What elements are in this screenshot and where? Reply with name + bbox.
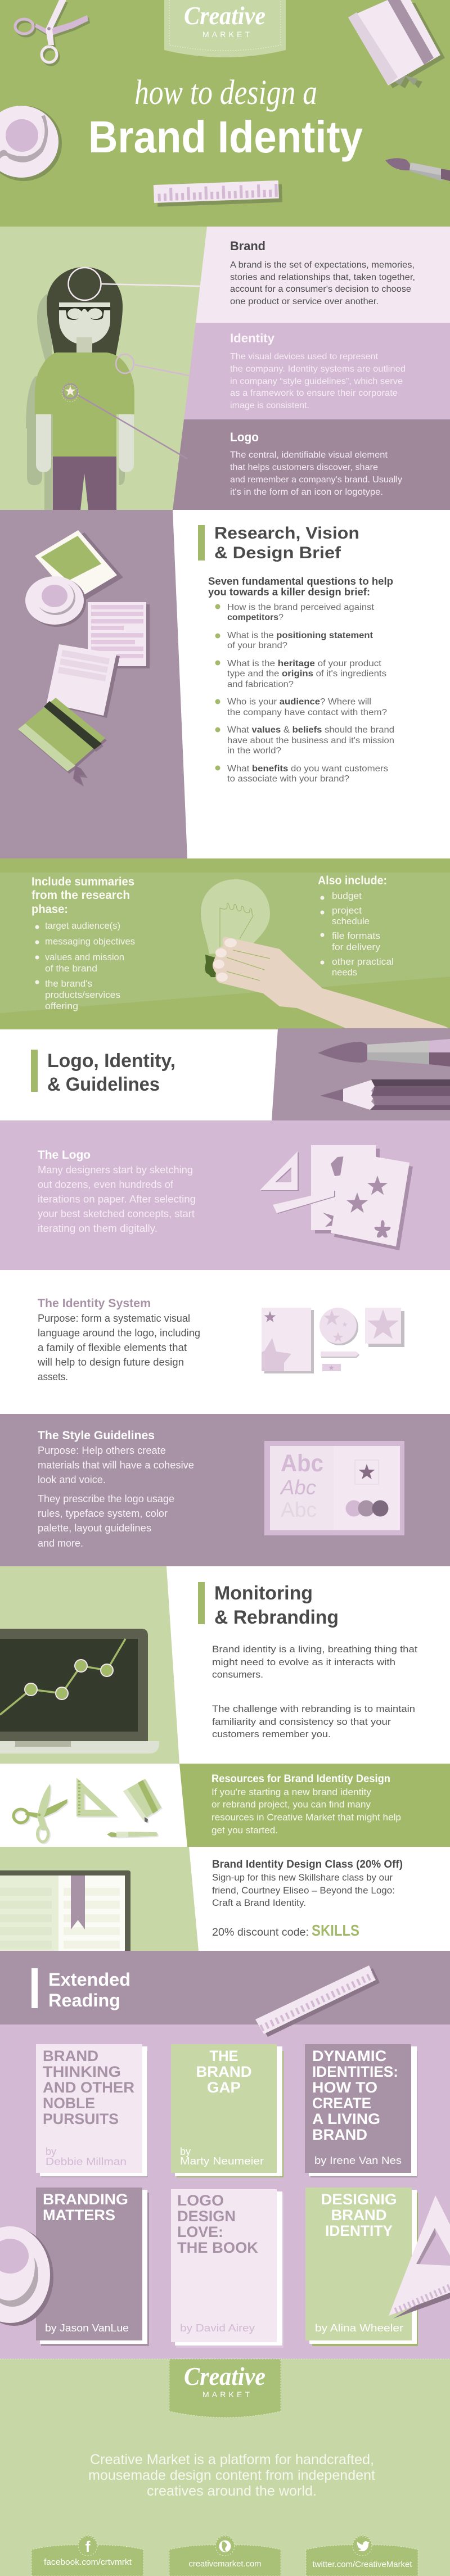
list: seven questions: What is the heritage of your product — [227, 659, 382, 668]
book: Logo Design Love: THE BOOK — [177, 2239, 258, 2256]
text: intro: Seven fundamental questions to help — [208, 576, 393, 587]
book: Dynamic Identities: IDENTITIES: — [312, 2063, 398, 2080]
illustration: coffee cup — [0, 2226, 53, 2326]
logo badge: MARKET — [202, 30, 250, 39]
book: Logo Design Love: by David Airey — [180, 2322, 255, 2334]
book: Dynamic Identities: A LIVING — [312, 2110, 380, 2127]
illustration: stationery — [262, 1308, 401, 1371]
tab: website: creativemarket.com — [189, 2559, 261, 2569]
text: include summaries: phase: — [32, 903, 68, 916]
illustration: brush and pencil — [272, 1028, 450, 1120]
text: include summaries: products/services — [45, 990, 120, 1000]
text: style guidelines: The Style Guidelines — [38, 1429, 155, 1442]
heading: logo, identity, guidelines: & Guidelines — [47, 1074, 160, 1095]
book: Logo Design Love: LOVE: — [177, 2224, 223, 2240]
text: resources — [212, 1773, 401, 1836]
text: the logo: your best sketched concepts, start — [38, 1208, 195, 1219]
text: style guidelines: materials that will have a cohesive — [38, 1459, 194, 1471]
panel: Identity: image is consistent. — [230, 401, 309, 410]
book: The Brand Gap: THE — [209, 2048, 238, 2064]
logo badge — [164, 0, 286, 57]
logo badge: Creative — [184, 1, 266, 30]
panel: Logo: and remember a company's brand. Usually — [230, 475, 402, 485]
tab: facebook: facebook.com/crtvmrkt — [44, 2557, 132, 2567]
text: the logo: out dozens, even hundreds of — [38, 1179, 174, 1190]
text: class: Brand Identity Design Class (20% Off) — [212, 1859, 403, 1870]
text: include summaries: the brand's — [45, 979, 92, 989]
text: class: 20% discount code: — [212, 1927, 309, 1938]
text: the logo: iterations on paper. After selecting — [38, 1194, 196, 1205]
text: about Creative Market — [88, 2452, 375, 2499]
text: resources: or rebrand project, you can find many — [212, 1800, 371, 1810]
icon: ruler — [154, 180, 280, 203]
tab: twitter: twitter.com/CreativeMarket — [313, 2560, 412, 2569]
text: include summaries — [32, 875, 135, 1011]
title: Brand Identity: Brand Identity — [88, 112, 363, 162]
callout: brand circle and line — [69, 268, 200, 300]
icon: notebook — [348, 0, 440, 85]
book: The Brand Gap: Marty Neumeier — [180, 2155, 264, 2167]
text: include summaries: from the research — [32, 889, 130, 902]
text: about Creative Market: mousemade design content from independent — [88, 2467, 375, 2483]
list: seven questions: have about the business and it's mission — [227, 736, 394, 745]
list: seven questions: of your brand? — [227, 641, 287, 650]
illustration: laptop with chart — [0, 1629, 159, 1754]
text: class — [212, 1859, 403, 1939]
text: identity system — [37, 1297, 200, 1382]
text: about Creative Market: Creative Market is a platform for handcrafted, — [90, 2452, 374, 2467]
section: research, vision and design brief — [0, 510, 450, 858]
list: seven questions: the company have contact with them? — [227, 708, 387, 717]
text: monitoring body: consumers. — [212, 1669, 263, 1680]
text: monitoring body — [212, 1644, 417, 1739]
text: class: Sign-up for this new Skillshare class by our — [212, 1873, 393, 1883]
text: class: Craft a Brand Identity. — [212, 1898, 306, 1908]
book: Designing Brand Identity: by Alina Wheeler — [315, 2322, 403, 2334]
text: also include: budget — [332, 891, 362, 901]
logo badge — [169, 2359, 281, 2417]
section: footer — [0, 2359, 450, 2576]
text: the logo — [38, 1149, 196, 1234]
text: also include: for delivery — [332, 942, 381, 952]
text: identity system: will help to design future design — [37, 1357, 184, 1368]
text: the logo: iterating on them digitally. — [38, 1223, 158, 1234]
text: style guidelines: look and voice. — [38, 1474, 106, 1485]
text: style guidelines: They prescribe the logo usage — [38, 1493, 174, 1504]
list: seven questions: How is the brand perceived against — [227, 603, 375, 612]
list: seven questions: What benefits do you want customers — [227, 764, 388, 774]
book: Dynamic Identities: BRAND — [312, 2126, 367, 2143]
illustration: style guide: Abc — [281, 1450, 323, 1477]
book: Designing Brand Identity: BRAND — [331, 2207, 387, 2224]
illustration: hand — [213, 937, 450, 1029]
illustration: style guide — [264, 1441, 404, 1535]
book: Dynamic Identities: by Irene Van Nes — [314, 2155, 402, 2166]
tab: website — [169, 2536, 281, 2576]
list: seven questions: to associate with your brand? — [227, 774, 349, 784]
section: logo, identity and guidelines header — [0, 1028, 450, 1120]
text: style guidelines: palette, layout guidelines — [38, 1522, 151, 1534]
list: seven questions: What values & beliefs should the brand — [227, 725, 394, 735]
text: include summaries: target audience(s) — [45, 921, 120, 931]
list: seven questions: What is the positioning statement — [227, 631, 373, 640]
book: Designing Brand Identity: DESIGNIG — [321, 2191, 397, 2208]
text: intro — [208, 576, 393, 598]
illustration: paper with lines — [88, 602, 146, 666]
text: also include: Also include: — [318, 874, 387, 887]
heading: research, vision and design brief — [198, 524, 359, 562]
list: seven questions: and fabrication? — [227, 680, 294, 689]
text: class: SKILLS — [312, 1922, 359, 1939]
book: Branding Matters — [36, 2188, 149, 2346]
callout: identity circle and line — [116, 354, 189, 376]
book: Designing Brand Identity — [305, 2188, 418, 2346]
text: the logo: The Logo — [38, 1149, 91, 1162]
heading: monitoring and rebranding: Monitoring — [214, 1583, 313, 1604]
text: monitoring body: Brand identity is a living, breathing thing that — [212, 1644, 417, 1655]
text: monitoring body: The challenge with rebranding is to maintain — [212, 1703, 415, 1714]
book: Dynamic Identities: DYNAMIC — [312, 2048, 386, 2064]
book: Brand Thinking — [36, 2044, 148, 2177]
panel: Brand: A brand is the set of expectations, memories, — [230, 260, 415, 270]
section: extended reading header — [0, 1951, 450, 2024]
text: also include: other practical — [332, 957, 394, 967]
illustration: green notebook — [18, 698, 105, 784]
section: book grid — [0, 1965, 450, 2359]
text: also include: file formats — [332, 931, 380, 941]
panel: the style guidelines — [0, 1415, 450, 1566]
panel: the identity system — [0, 1270, 450, 1415]
text: include summaries: offering — [45, 1001, 78, 1011]
panel: Identity: in company “style guidelines”, which serve — [230, 377, 403, 386]
book: Brand Thinking: PURSUITS — [43, 2110, 119, 2127]
illustration: green tools — [14, 1778, 161, 1842]
text: resources: Resources for Brand Identity Design — [212, 1773, 390, 1785]
panel: Brand — [196, 227, 450, 323]
callout: logo star and line — [62, 384, 187, 459]
book: Branding Matters: MATTERS — [43, 2207, 115, 2224]
logo badge: MARKET — [202, 2390, 250, 2399]
panel: Brand: one product or service over another. — [230, 297, 379, 306]
illustration: sketches — [260, 1145, 410, 1246]
text: include summaries: messaging objectives — [45, 937, 135, 947]
panel: Brand: account for a consumer's decision to choose — [230, 284, 411, 294]
book: Brand Thinking: by — [46, 2146, 56, 2157]
book: Brand Thinking: Debbie Millman — [46, 2156, 127, 2167]
book: Dynamic Identities — [305, 2044, 417, 2177]
tab: facebook: f — [86, 2538, 91, 2555]
title: how to design a: how to design a — [134, 74, 317, 112]
panel: Identity: the company. Identity systems are outlined — [230, 364, 406, 374]
panel: Logo: Logo — [230, 430, 259, 444]
panel: Identity: The visual devices used to represent — [230, 352, 379, 361]
book: The Brand Gap — [171, 2044, 284, 2177]
panel: Logo — [173, 419, 450, 510]
list: seven questions: Who is your audience ? Where will — [227, 697, 371, 707]
panel: Brand: stories and relationships that, taken together, — [230, 273, 415, 282]
section: monitoring and rebranding — [0, 1566, 450, 1764]
heading: research, vision and design brief: & Design Brief — [214, 544, 341, 562]
tab: facebook — [32, 2536, 143, 2576]
text: identity system: The Identity System — [38, 1297, 151, 1310]
panel: Logo: The central, identifiable visual element — [230, 450, 388, 460]
icon: coffee cup and saucer — [0, 106, 62, 181]
text: style guidelines: Purpose: Help others create — [38, 1445, 166, 1456]
panel: the logo — [0, 1120, 450, 1270]
text: intro: you towards a killer design brief: — [208, 586, 370, 598]
text: also include: project — [332, 906, 362, 916]
list: seven questions: in the world? — [227, 746, 281, 756]
book: Designing Brand Identity: IDENTITY — [325, 2222, 393, 2239]
book: Logo Design Love: DESIGN — [177, 2208, 236, 2225]
text: resources: If you're starting a new brand identity — [212, 1787, 372, 1797]
illustration: style guide: Abc — [280, 1476, 316, 1499]
text: identity system: a family of flexible elements that — [38, 1342, 187, 1353]
text: also include: needs — [332, 968, 357, 978]
panel: Brand: Brand — [230, 239, 266, 253]
book: Brand Thinking: BRAND — [43, 2048, 98, 2064]
text: include summaries: Include summaries — [32, 875, 134, 888]
panel: Identity: Identity — [230, 331, 275, 345]
text: resources: resources in Creative Market that might help — [212, 1813, 401, 1823]
list: seven questions — [215, 603, 394, 784]
list: seven questions: competitors? — [227, 613, 284, 622]
heading: extended reading — [32, 1968, 130, 2010]
text: also include — [318, 874, 394, 978]
book: The Brand Gap: by — [180, 2146, 191, 2157]
panel: Logo: that helps customers discover, share — [230, 463, 378, 472]
text: include summaries: values and mission — [45, 952, 124, 962]
text: class: friend, Courtney Eliseo – Beyond the Logo: — [212, 1886, 395, 1896]
icon: scissors — [15, 0, 88, 62]
book: Brand Thinking: NOBLE — [43, 2095, 95, 2112]
section: brand identity design class — [0, 1847, 450, 1951]
book: Logo Design Love — [171, 2189, 284, 2348]
heading: extended reading: Extended — [48, 1969, 130, 1990]
text: also include: schedule — [332, 916, 370, 927]
heading: monitoring and rebranding — [198, 1582, 339, 1628]
hero section — [0, 0, 450, 227]
logo badge: Creative — [184, 2362, 266, 2390]
text: include summaries: of the brand — [45, 964, 97, 974]
heading: logo, identity, guidelines: Logo, Identity, — [47, 1050, 176, 1072]
list: seven questions: type and the origins of it's ingredients — [227, 669, 386, 679]
book: Dynamic Identities: CREATE — [312, 2095, 371, 2112]
book: Brand Thinking: AND OTHER — [43, 2079, 134, 2096]
figure: person with glasses — [26, 267, 134, 510]
text: style guidelines — [38, 1429, 194, 1549]
illustration: blank paper — [47, 644, 116, 716]
heading: extended reading: Reading — [48, 1990, 120, 2010]
illustration: tablet with book — [0, 1870, 130, 1951]
text: resources: get you started. — [212, 1825, 278, 1836]
text: style guidelines: rules, typeface system, color — [38, 1508, 168, 1519]
tab: twitter — [306, 2536, 418, 2576]
text: monitoring body: customers remember you. — [212, 1729, 331, 1739]
section: resources — [0, 1764, 450, 1847]
book: Branding Matters: by Jason VanLue — [45, 2322, 129, 2334]
panel: Identity: as a framework to ensure their corporate — [230, 388, 398, 398]
panel: Logo: it's in the form of an icon or logotype. — [230, 487, 383, 497]
book: Branding Matters: BRANDING — [43, 2191, 128, 2208]
book: Logo Design Love: LOGO — [177, 2192, 224, 2209]
illustration: tilted ruler — [255, 1965, 376, 2034]
text: about Creative Market: creatives around the world. — [147, 2483, 317, 2499]
text: monitoring body: familiarity and consistency so that your — [212, 1716, 391, 1727]
book: The Brand Gap: BRAND — [196, 2063, 252, 2080]
book: Brand Thinking: THINKING — [43, 2063, 121, 2080]
icon: paintbrush — [385, 158, 450, 181]
illustration: light bulb — [201, 879, 270, 977]
book: Dynamic Identities: HOW TO — [312, 2079, 377, 2096]
text: identity system: language around the logo, including — [38, 1327, 200, 1339]
text: identity system: assets. — [38, 1371, 68, 1382]
book: The Brand Gap: GAP — [207, 2079, 241, 2096]
heading: logo, identity, guidelines — [31, 1050, 176, 1095]
heading: research, vision and design brief: Research, Vision — [214, 524, 359, 543]
text: style guidelines: and more. — [38, 1538, 83, 1549]
section: definitions — [0, 227, 450, 510]
heading: monitoring and rebranding: & Rebranding — [214, 1607, 339, 1628]
illustration: coffee cup — [25, 576, 86, 627]
text: the logo: Many designers start by sketching — [38, 1164, 193, 1176]
section: research summaries — [0, 858, 450, 1029]
panel: Identity — [184, 323, 450, 419]
illustration: style guide: Abc — [281, 1498, 317, 1521]
illustration: set square — [389, 2195, 450, 2319]
illustration: photo — [35, 530, 117, 601]
text: monitoring body: might need to evolve as it interacts with — [212, 1657, 395, 1667]
text: identity system: Purpose: form a systematic visual — [38, 1313, 190, 1324]
